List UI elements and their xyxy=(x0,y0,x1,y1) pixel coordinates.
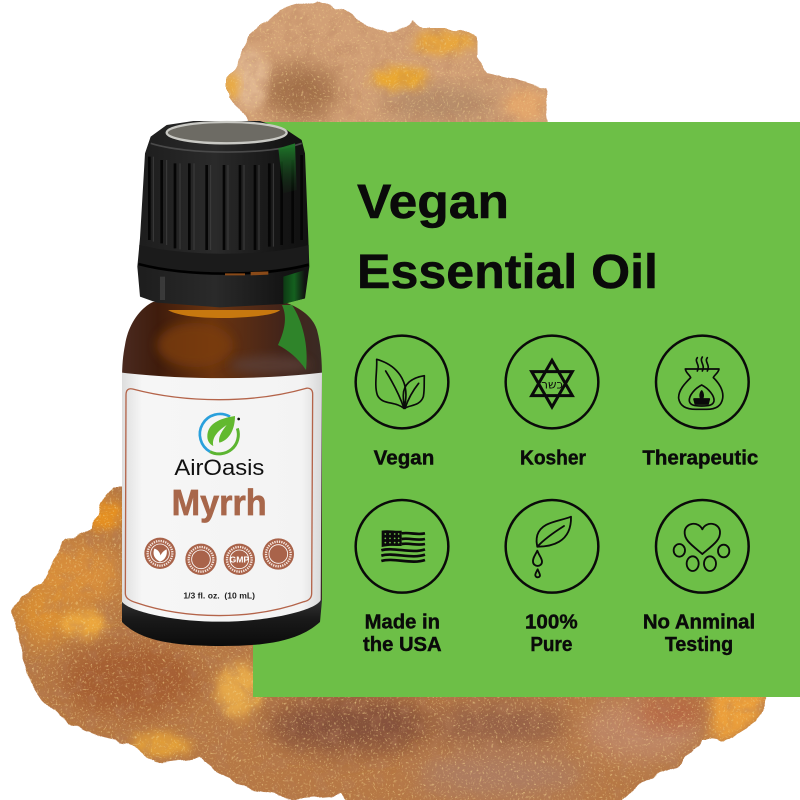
green panel xyxy=(253,122,800,697)
title: Vegan xyxy=(357,176,509,229)
icon: leaves xyxy=(376,359,424,408)
label: Made in the USA: Made in xyxy=(365,611,440,633)
title: Essential Oil xyxy=(357,246,658,299)
icon: oil burner xyxy=(679,357,723,409)
label: 100% Pure xyxy=(525,611,578,656)
badge: no animal testing xyxy=(643,500,755,656)
logo: Air Oasis xyxy=(174,414,264,480)
icon: heart paw xyxy=(674,524,729,571)
badge: kosher xyxy=(506,336,598,469)
badge: 100% pure xyxy=(506,500,598,656)
icon: star with hechsher: כשר xyxy=(541,377,563,391)
resin rock: bottom xyxy=(0,480,800,800)
label: No Anminal Testing: No Anminal xyxy=(643,611,755,633)
bottle glass xyxy=(122,302,322,600)
label: 100% Pure: 100% xyxy=(525,611,578,633)
title xyxy=(357,176,658,299)
label: Therapeutic: Therapeutic xyxy=(642,447,758,469)
bottle label xyxy=(122,373,322,622)
badge: vegan xyxy=(356,336,448,469)
resin rock: top xyxy=(226,2,548,122)
badge: therapeutic xyxy=(642,336,758,469)
label: No Anminal Testing: Testing xyxy=(665,634,733,656)
label: Vegan: Vegan xyxy=(374,447,434,469)
badge: made in the USA xyxy=(356,500,448,656)
label: Made in the USA xyxy=(363,611,442,656)
logo: Air Oasis: AirOasis xyxy=(174,455,264,480)
label: Kosher: Kosher xyxy=(520,447,586,469)
bottle cap xyxy=(137,121,309,307)
cap ribs xyxy=(149,155,302,250)
icon: flag xyxy=(381,530,425,562)
icon: leaf and drops xyxy=(533,517,571,577)
product name: Myrrh xyxy=(172,482,267,523)
certification seals xyxy=(144,538,294,575)
label border xyxy=(125,388,313,616)
label: 100% Pure: Pure xyxy=(530,634,572,656)
bottle xyxy=(122,121,322,646)
volume text: 1/3 fl. oz. (10 mL) xyxy=(183,591,255,600)
label: Made in the USA: the USA xyxy=(363,634,442,656)
label: No Anminal Testing xyxy=(643,611,755,656)
bottle base xyxy=(122,600,322,646)
certification seals: GMP xyxy=(229,554,249,564)
